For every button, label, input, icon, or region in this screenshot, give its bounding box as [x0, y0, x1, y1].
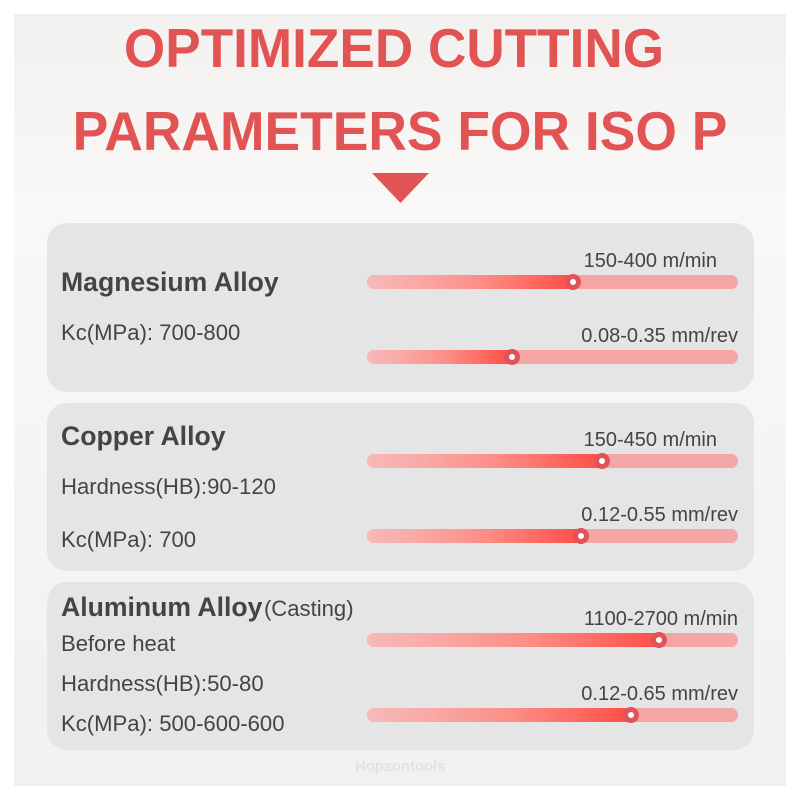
- text: aluminum Kc: Kc(MPa): 500-600-600: [61, 711, 285, 736]
- text: copper Kc: Kc(MPa): 700: [61, 527, 196, 552]
- value: magnesium speed: 150-400 m/min: [584, 250, 717, 272]
- heading: copper alloy: Copper Alloy: [61, 421, 226, 451]
- panel: copper alloy: [47, 403, 754, 571]
- text: magnesium Kc: Kc(MPa): 700-800: [61, 320, 240, 345]
- title: OPTIMIZED CUTTING: [123, 17, 664, 79]
- slider: magnesium feed: [367, 350, 738, 364]
- slider: copper feed: [367, 529, 738, 543]
- text: aluminum before heat: Before heat: [61, 631, 175, 656]
- panel: magnesium alloy: [47, 223, 754, 392]
- slider: magnesium speed: [367, 275, 738, 289]
- slider: aluminum speed: [367, 633, 738, 647]
- title: PARAMETERS FOR ISO P: [73, 100, 727, 162]
- value: aluminum feed: 0.12-0.65 mm/rev: [581, 683, 738, 705]
- title: [73, 17, 727, 162]
- value: copper feed: 0.12-0.55 mm/rev: [581, 504, 738, 526]
- panel: aluminum alloy: [47, 582, 754, 750]
- text: copper hardness: Hardness(HB):90-120: [61, 474, 276, 499]
- heading: aluminum alloy: Aluminum Alloy(Casting): [61, 592, 354, 622]
- value: aluminum speed: 1100-2700 m/min: [584, 608, 738, 630]
- text: aluminum hardness: Hardness(HB):50-80: [61, 671, 264, 696]
- arrow: down triangle: [372, 173, 429, 203]
- slider: copper speed: [367, 454, 738, 468]
- heading: magnesium alloy: Magnesium Alloy: [61, 267, 279, 297]
- slider: aluminum feed: [367, 708, 738, 722]
- value: magnesium feed: 0.08-0.35 mm/rev: [581, 325, 738, 347]
- watermark: Hopsontools: [355, 759, 445, 775]
- value: copper speed: 150-450 m/min: [584, 429, 717, 451]
